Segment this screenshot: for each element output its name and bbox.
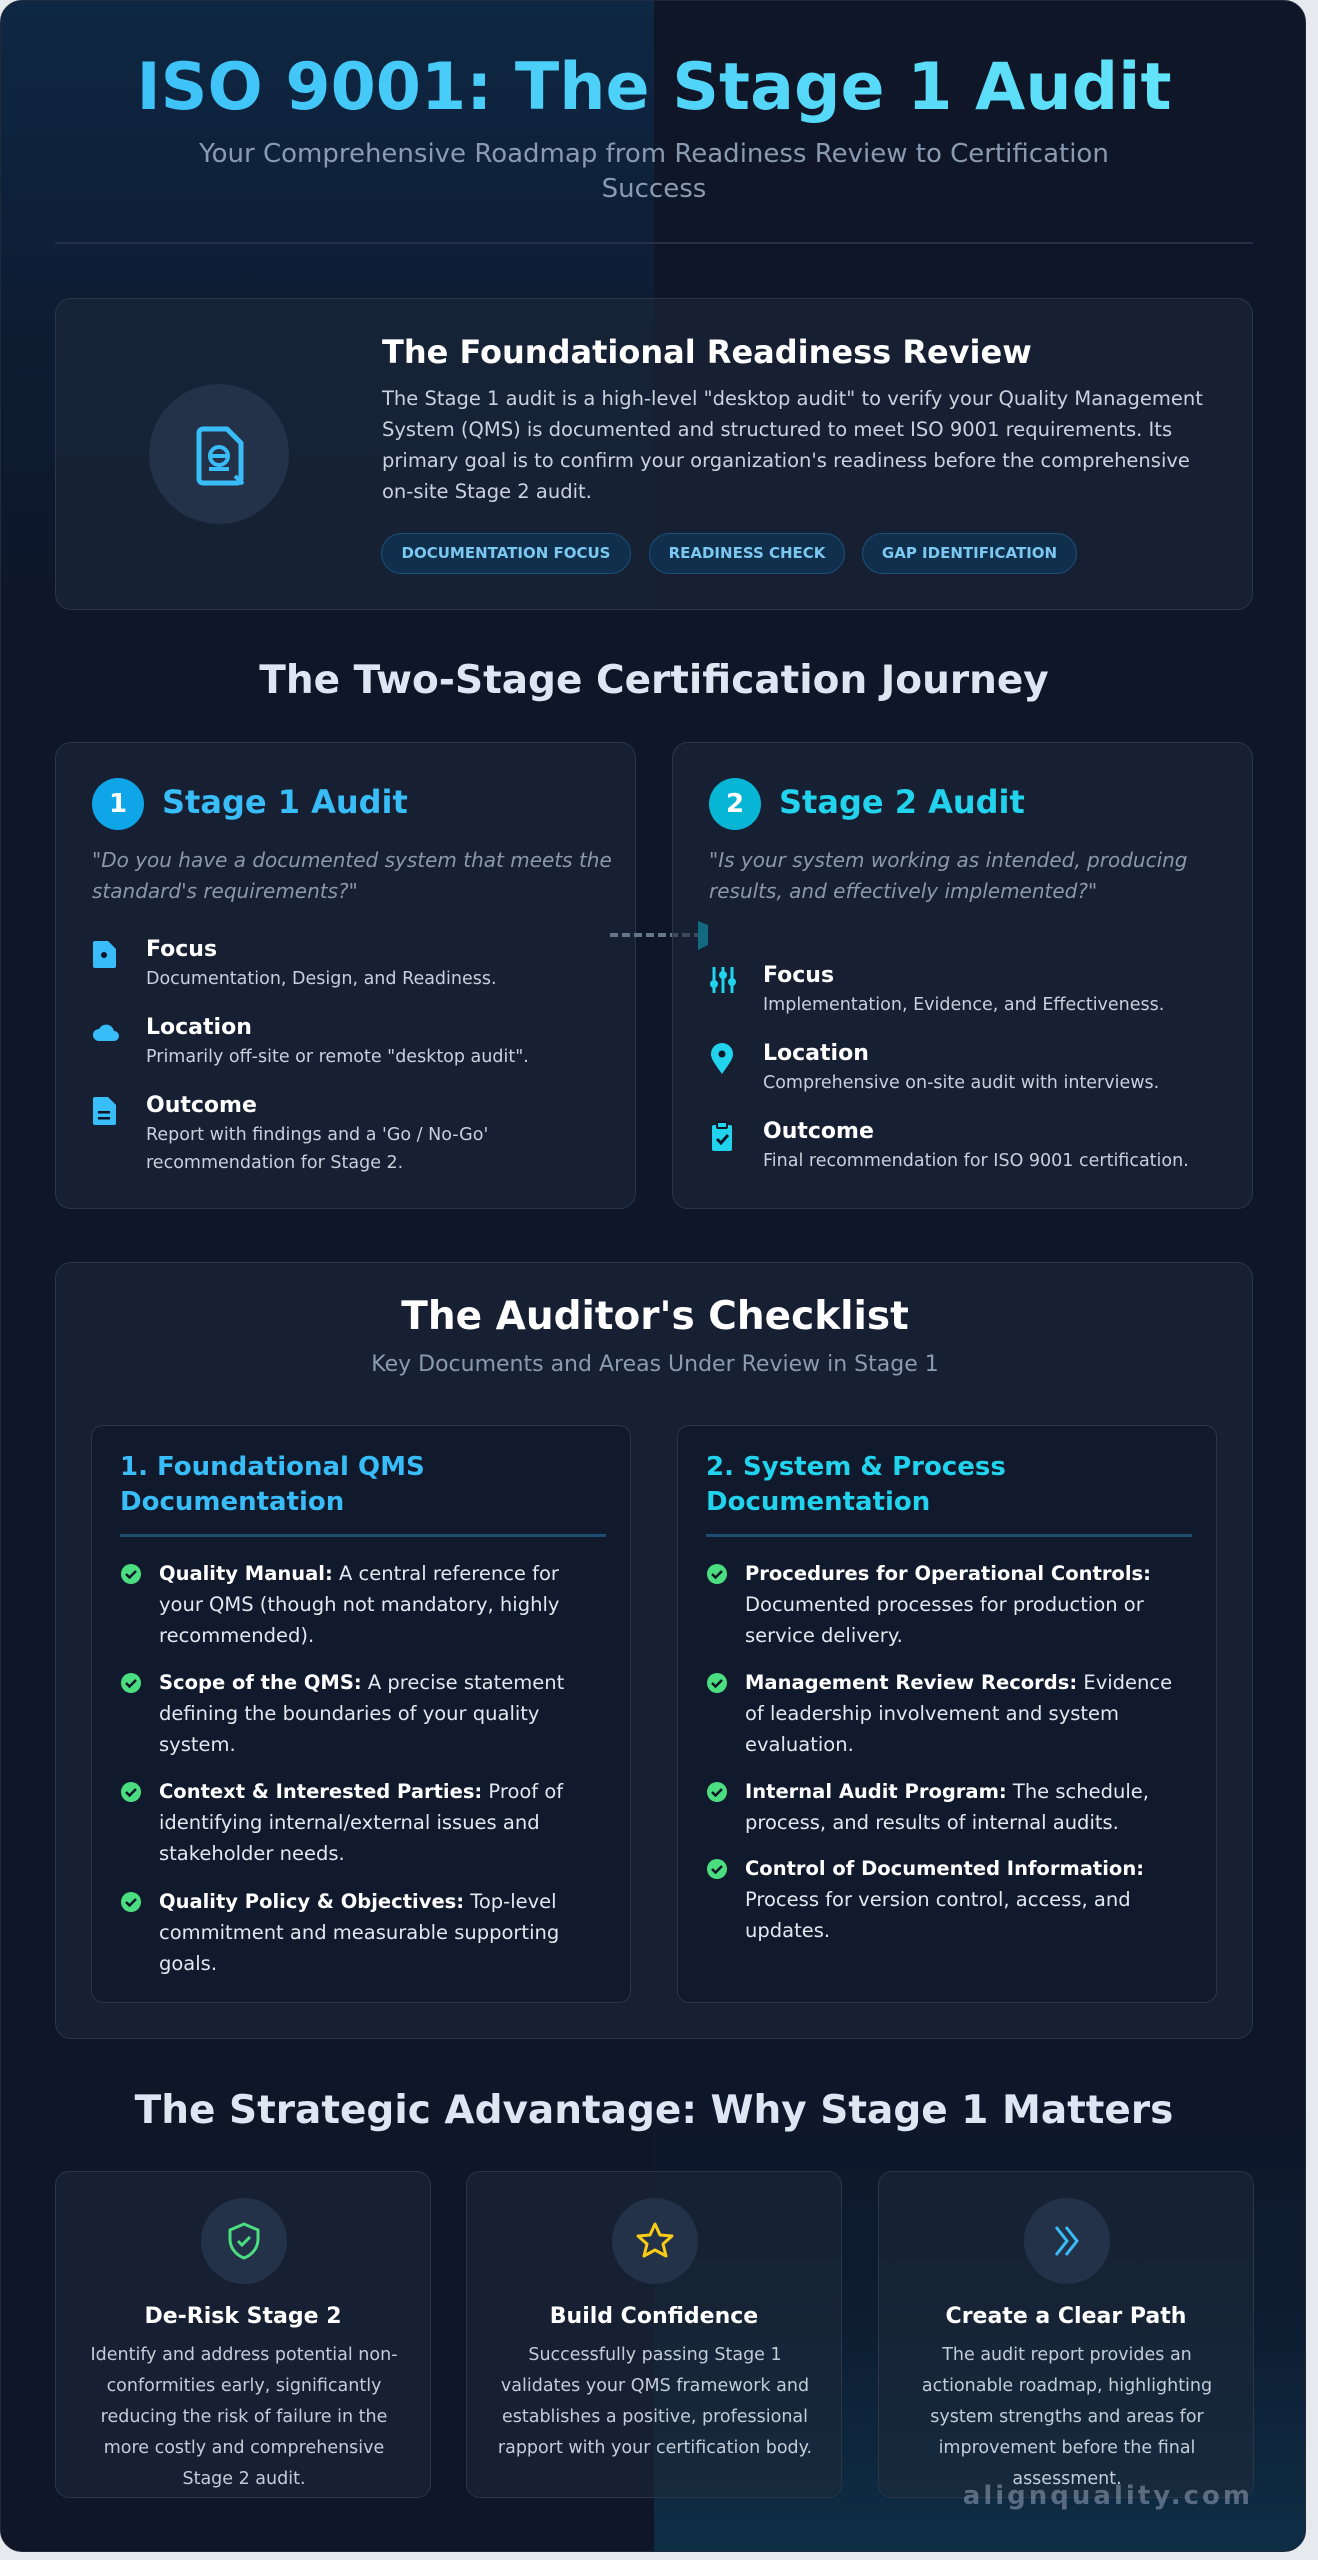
subheading: 1. Foundational QMS Documentation	[120, 1452, 425, 1517]
icon: document search	[149, 384, 289, 524]
card: build confidence: Successfully passing Stage 1 validates your QMS framework and establishes a positive, professional rapport with your certification body.	[498, 2345, 812, 2458]
item: outcome	[712, 1119, 1189, 1171]
card: build confidence: Build Confidence	[550, 2304, 758, 2329]
panel: stage 2	[672, 742, 1253, 1209]
check item: Context & Interested Parties: Proof of identifying internal/external issues and stakeholder needs.	[159, 1780, 563, 1865]
item: location: Location	[763, 1041, 869, 1066]
item: focus	[93, 937, 497, 989]
pill: readiness check	[649, 533, 845, 574]
item: location	[711, 1041, 1159, 1093]
check item: Control of Documented Information: Process for version control, access, and updates.	[745, 1857, 1144, 1942]
quote: "Is your system working as intended, producing results, and effectively implemented?"	[709, 848, 1188, 903]
card: create a clear path: Create a Clear Path	[946, 2304, 1186, 2329]
panel: readiness review	[55, 298, 1253, 610]
heading: two-stage journey: The Two-Stage Certification Journey	[259, 658, 1049, 703]
panel: system & process documentation	[677, 1425, 1217, 2003]
subheading: 2. System & Process Documentation	[706, 1452, 1006, 1517]
item: location: Primarily off-site or remote "desktop audit".	[146, 1047, 529, 1067]
check item: Management Review Records: Evidence of leadership involvement and system evaluation.	[745, 1671, 1172, 1756]
arrow: stage connector	[610, 921, 708, 950]
pill: documentation focus: DOCUMENTATION FOCUS	[402, 544, 610, 562]
icon: star	[612, 2198, 698, 2284]
watermark: alignquality.com	[963, 2481, 1253, 2511]
item: location: Comprehensive on-site audit with interviews.	[763, 1073, 1159, 1093]
panel: foundational qms documentation	[91, 1425, 631, 2003]
pill: documentation focus	[381, 533, 631, 574]
check item: Internal Audit Program: The schedule, process, and results of internal audits.	[745, 1780, 1149, 1834]
item: focus: Implementation, Evidence, and Effectiveness.	[763, 995, 1164, 1015]
heading: strategic advantage: The Strategic Advantage: Why Stage 1 Matters	[135, 2088, 1173, 2133]
quote: "Do you have a documented system that meets the standard's requirements?"	[92, 848, 612, 903]
item: location	[93, 1015, 529, 1067]
item: focus: Focus	[763, 963, 834, 988]
check item: Procedures for Operational Controls: Documented processes for production or service delivery.	[745, 1562, 1151, 1647]
subtitle: Your Comprehensive Roadmap from Readiness Review to Certification Success	[199, 139, 1109, 204]
number badge 2	[709, 778, 761, 830]
check item: Quality Policy & Objectives: Top-level commitment and measurable supporting goals.	[159, 1890, 559, 1975]
item: outcome: Outcome	[146, 1093, 257, 1118]
card: de-risk stage 2: De-Risk Stage 2	[144, 2304, 342, 2329]
item: outcome: Report with findings and a 'Go / No-Go' recommendation for Stage 2.	[146, 1125, 488, 1173]
text block: The Stage 1 audit is a high-level "desktop audit" to verify your Quality Management System (QMS) is documented and structured to meet ISO 9001 requirements. Its primary goal is to confirm your organization's readiness before the comprehensive on-site Stage 2 audit.	[382, 387, 1203, 503]
panel: stage 1	[55, 742, 636, 1209]
stage 2 title: Stage 2 Audit	[779, 783, 1025, 821]
stage 1 title: Stage 1 Audit	[162, 783, 408, 821]
pill: gap identification: GAP IDENTIFICATION	[882, 544, 1057, 562]
number badge 2: 2	[726, 789, 744, 819]
card: create a clear path: The audit report provides an actionable roadmap, highlighting system strengths and areas for improvement before the final assessment.	[922, 2345, 1212, 2489]
number badge 1	[92, 778, 144, 830]
pill: readiness check: READINESS CHECK	[669, 544, 825, 562]
item: outcome: Outcome	[763, 1119, 874, 1144]
title	[1, 45, 1307, 131]
heading: The Foundational Readiness Review	[382, 333, 1032, 371]
card: de-risk stage 2	[55, 2171, 431, 2498]
icon: chevrons	[1024, 2198, 1110, 2284]
item: focus	[710, 963, 1164, 1015]
title: ISO 9001: The Stage 1 Audit	[136, 50, 1172, 125]
icon: shield	[201, 2198, 287, 2284]
item: focus: Focus	[146, 937, 217, 962]
panel: auditor's checklist	[55, 1262, 1253, 2039]
card: de-risk stage 2: Identify and address potential non-conformities early, significantly reducing the risk of failure in the more costly and comprehensive Stage 2 audit.	[90, 2345, 398, 2489]
check item: Quality Manual: A central reference for your QMS (though not mandatory, highly recommended).	[159, 1562, 559, 1647]
subheading: Key Documents and Areas Under Review in Stage 1	[371, 1352, 939, 1377]
item: focus: Documentation, Design, and Readiness.	[146, 969, 497, 989]
heading: The Auditor's Checklist	[401, 1294, 909, 1339]
card: build confidence	[466, 2171, 842, 2498]
pill: gap identification	[862, 533, 1077, 574]
item: outcome	[93, 1093, 488, 1173]
item: outcome: Final recommendation for ISO 9001 certification.	[763, 1151, 1189, 1171]
card: create a clear path	[878, 2171, 1254, 2498]
check item: Scope of the QMS: A precise statement defining the boundaries of your quality system.	[159, 1671, 564, 1756]
number badge 1: 1	[109, 789, 127, 819]
item: location: Location	[146, 1015, 252, 1040]
